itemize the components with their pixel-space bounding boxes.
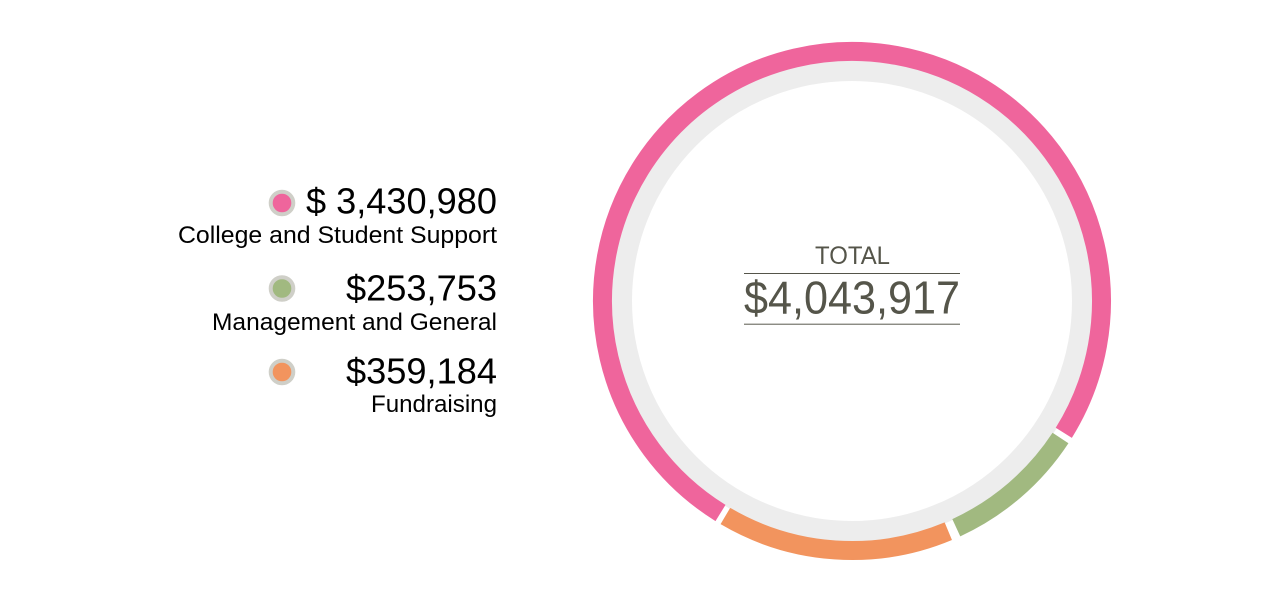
amount: management and general: $253,753 <box>346 268 497 309</box>
arc: College and Student Support <box>602 51 1101 513</box>
arc: Fundraising <box>725 516 948 551</box>
label: management and general: Management and General <box>212 309 497 336</box>
track ring <box>622 70 1082 532</box>
label: fundraising: Fundraising <box>371 391 497 418</box>
legend item: Fundraising <box>271 350 497 418</box>
legend item: College and Student Support <box>178 180 497 249</box>
legend <box>178 180 497 418</box>
arc: Management and General <box>956 438 1060 528</box>
amount: fundraising: $359,184 <box>346 350 497 392</box>
center total <box>744 242 960 325</box>
total label: TOTAL <box>815 242 890 270</box>
amount: college and student support: $ 3,430,980 <box>306 180 497 222</box>
legend dot: green <box>271 277 293 300</box>
legend dot: orange <box>271 361 293 383</box>
donut chart <box>602 51 1101 551</box>
legend dot: pink <box>271 192 293 214</box>
legend item: Management and General <box>212 268 497 336</box>
total amount: $4,043,917 <box>744 272 960 324</box>
label: college and student support: College and Student Support <box>178 222 497 249</box>
